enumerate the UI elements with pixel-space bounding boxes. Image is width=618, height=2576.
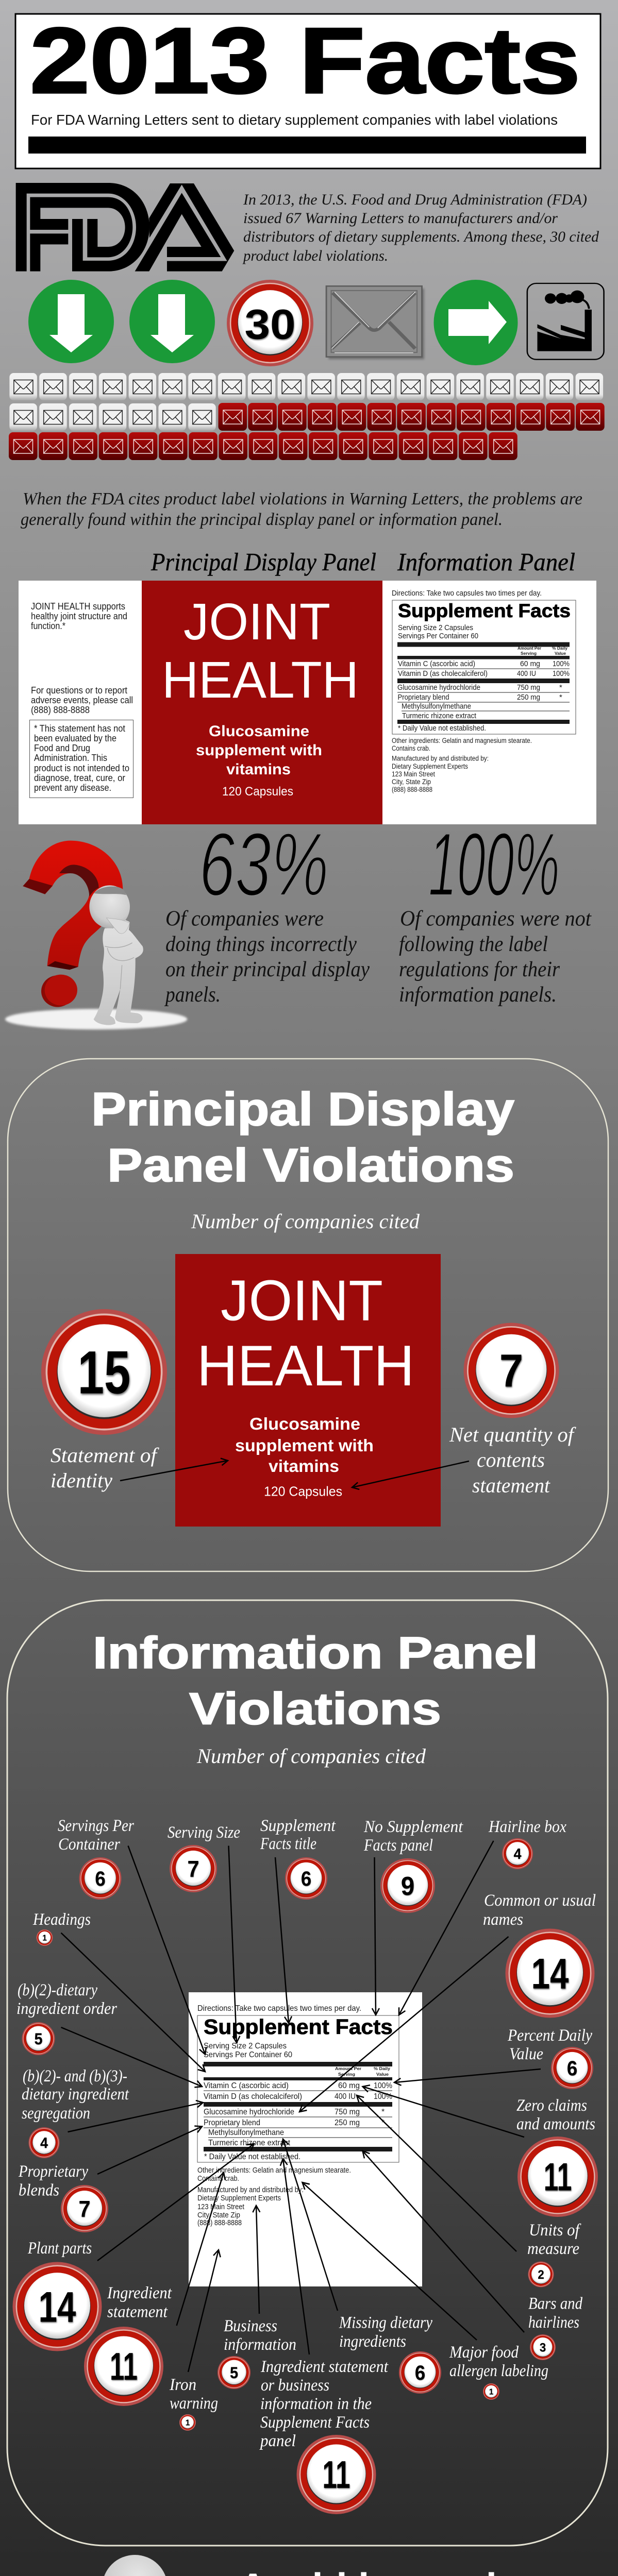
callout: proprietary blends 7: blends [19,2181,59,2200]
callout: ingredient statement 11 [84,2284,172,2406]
stat: 63 percent [164,815,370,1007]
icon: speed sign 30: 30 [244,301,296,348]
callout: ingredient statement or business information 11: information in the [260,2395,372,2413]
label left panel text: function.* [31,621,65,631]
supplement facts label: Other ingredients: Gelatin and magnesium stearate. [197,2166,351,2175]
title rule [28,137,586,154]
arrow: iron warning [188,2250,219,2372]
label left panel text: For questions or to report [31,685,127,696]
label left panel text: diagnose, treat, cure, or [34,773,125,783]
label supplement facts panel: Directions: Take two capsules two times per day. [392,589,542,598]
callout: hairline box 4: Hairline box [488,1818,566,1836]
red envelopes row 2 [219,403,605,431]
callout: missing dietary ingredients 6: Missing dietary [339,2313,432,2332]
label supplement facts panel: Amount Per [517,646,541,651]
callout: plant parts 14: 14 [39,2282,76,2331]
heading: information panel: Information Panel [397,548,575,576]
supplement facts label: (888) 888-8888 [197,2219,242,2227]
supplement facts label: * [381,2108,385,2116]
subheading: Number of companies cited [196,1744,426,1768]
callout: no supplement facts panel 9: 9 [401,1871,414,1901]
label left panel text: Food and Drug [34,743,90,753]
label supplement facts panel: Supplement Facts [398,600,571,621]
callout: business information 5: 5 [230,2364,238,2382]
supplement facts label: Glucosamine hydrochloride [204,2108,294,2116]
red principal display label [175,1254,441,1527]
supplement facts label: 100% [374,2081,392,2090]
icon: FDA logo [16,183,234,272]
label left panel text: JOINT HEALTH supports [31,601,125,612]
label supplement facts panel: 400 IU [517,669,536,678]
arrow: proprietary blends [97,2127,202,2174]
supplement facts label: * [381,2119,385,2127]
heading: principal display panel: Principal Display Panel [151,548,376,576]
callout: net quantity 7: contents [477,1448,545,1471]
arrow: headings [61,1933,205,2072]
label red principal panel: JOINT [183,593,330,651]
arrow: bars and hairlines [363,2151,524,2332]
label left panel text: healthy joint structure and [31,611,127,621]
subtitle: For FDA Warning Letters sent to dietary supplement companies with label violations [31,112,558,128]
label red principal panel: supplement with [196,742,322,759]
callout: proprietary blends 7 [18,2162,108,2232]
arrow: ingredient statement [177,2173,224,2326]
supplement facts label: Contains crab. [197,2175,239,2183]
callout: percent daily value 6: 6 [567,2057,577,2080]
arrow: units of measure [357,2095,516,2251]
callout: bars and hairlines 3 [528,2295,582,2360]
callout: ingredient segregation 4: segregation [22,2104,90,2123]
intro text: distributors of dietary supplements. Among these, 30 cited [243,228,599,245]
callout: ingredient statement or business information 11: Supplement Facts [260,2413,370,2432]
supplement facts label: Serving Size 2 Capsules [204,2042,287,2050]
callout: ingredient segregation 4: 4 [40,2135,48,2151]
callout: servings per container 6 [58,1817,134,1900]
red principal display label: Glucosamine [249,1414,360,1433]
label left panel text: been evaluated by the [34,733,116,743]
stat text: principal display [164,907,370,1007]
arrow: major food allergen [302,2182,477,2340]
label supplement facts panel: * Daily Value not established. [398,724,486,733]
intro text: In 2013, the U.S. Food and Drug Administration (FDA) [243,191,587,208]
supplement facts label: 250 mg [335,2119,360,2127]
callout: zero claims and amounts 11 [516,2096,598,2217]
illustration: figure with magnifying glass [40,2555,211,2576]
label red principal panel: 120 Capsules [222,785,293,799]
arrow: common names [299,1937,508,2112]
label left panel text: adverse events, please call [31,695,133,705]
callout: business information 5: Business [224,2317,277,2335]
supplement facts label: Dietary Supplement Experts [197,2194,281,2202]
label supplement facts panel: * [559,693,562,702]
label supplement facts panel: City, State Zip [392,778,431,786]
stat text: principal display: on their principal display [165,958,370,981]
label supplement facts panel: 123 Main Street [392,770,435,778]
callout: zero claims and amounts 11: Zero claims [516,2096,587,2115]
callout: iron warning 1 [169,2376,218,2431]
label supplement facts panel: 750 mg [517,683,540,692]
callout: percent daily value 6: Percent Daily [507,2026,592,2045]
label supplement facts panel: 100% [553,659,570,668]
label left panel text: product is not intended to [34,763,129,773]
callout: iron warning 1: warning [170,2394,218,2413]
icon: green down arrow 1 [28,280,114,363]
callout: percent daily value 6: Value [509,2045,543,2063]
callout: missing dietary ingredients 6 [339,2313,441,2394]
icon: green right arrow [434,280,517,365]
label supplement facts panel: (888) 888-8888 [392,786,432,793]
callout: zero claims and amounts 11: 11 [544,2156,572,2199]
white envelopes row 1 [9,373,603,400]
illustration: thinking figure with question mark [5,841,187,1029]
supplement facts label: Supplement Facts [204,2015,393,2039]
arrow: facts title [275,1857,289,2023]
supplement facts label: Amount Per [335,2066,362,2071]
callout: statement of identity 15 [41,1309,167,1492]
red principal display label: 120 Capsules [264,1484,342,1499]
callout: no supplement facts panel 9: No Supplement [363,1818,463,1836]
callout: ingredient statement 11: 11 [110,2345,138,2388]
label supplement facts panel: Manufactured by and distributed by: [392,755,489,762]
label red principal panel [142,581,382,824]
callout: net quantity 7: statement [472,1473,550,1497]
callout: statement of identity 15: 15 [78,1338,130,1406]
label left panel text: prevent any disease. [34,783,111,793]
red principal display label: JOINT [221,1269,383,1333]
callout: net quantity 7: Net quantity of [449,1423,576,1446]
label supplement facts panel: 100% [553,669,570,678]
question mark [23,841,123,1007]
callout: no supplement facts panel 9 [363,1818,463,1913]
arrow: missing ingredients [283,2139,338,2311]
platform [5,1009,187,1029]
arrow: zero claims [363,2087,524,2137]
callout: ingredient statement or business information 11: panel [259,2432,296,2450]
callout: missing dietary ingredients 6: 6 [415,2362,425,2384]
callout: missing dietary ingredients 6: ingredients [339,2332,406,2351]
callout: proprietary blends 7: Proprietary [18,2162,88,2181]
label left panel text [30,601,133,798]
label supplement facts panel: Vitamin D (as cholecalciferol) [398,669,488,678]
heading: Principal Display [91,1083,514,1136]
callout: net quantity 7: 7 [499,1345,523,1397]
callout: supplement facts title 6: Facts title [260,1835,316,1853]
product label [19,581,596,824]
icon: green down arrow 2 [129,280,215,363]
title panel [15,9,600,168]
callout: major food allergen labeling 1 [449,2343,548,2400]
supplement facts label: 400 IU [335,2092,356,2101]
red principal display label: supplement with [235,1436,374,1455]
supplement facts label: 123 Main Street [197,2203,244,2211]
supplement facts label: 750 mg [335,2108,360,2116]
icon: speed sign 30 [227,280,313,366]
arrow: serving size [229,1846,237,2043]
callout: plant parts 14 [12,2239,102,2351]
callout: ingredient statement or business information 11: or business [261,2376,329,2395]
panel: information panel violations [7,1600,608,2546]
icon: envelope [326,286,424,359]
label supplement facts panel: Proprietary blend [398,693,449,702]
callout: servings per container 6: Container [58,1835,120,1854]
callout: (b)(2) dietary ingredient order 5: 5 [34,2030,43,2048]
label supplement facts panel: Turmeric rhizone extract [402,711,477,720]
arrow: servings per container [128,1846,205,2055]
supplement facts label [189,1992,422,2286]
label supplement facts panel: 60 mg [520,659,540,668]
label red principal panel: vitamins [226,761,291,778]
callout: percent daily value 6 [507,2026,593,2089]
label supplement facts panel [392,589,576,793]
heading: Panel Violations [107,1140,514,1192]
heading: Information Panel [93,1628,538,1678]
supplement facts label: 60 mg [338,2081,360,2090]
supplement facts label: Vitamin C (ascorbic acid) [204,2081,289,2090]
stat: 100 percent [399,815,592,1007]
supplement facts label: Value [376,2072,389,2077]
callout: iron warning 1: Iron [169,2376,196,2394]
figure [89,885,143,1025]
callout: business information 5: information [224,2335,296,2354]
icon: factory [527,283,604,360]
heading: Violations [189,1684,441,1734]
arrow: statement of identity [120,1461,228,1481]
callout: ingredient statement or business information 11: 11 [323,2453,350,2496]
callout: bars and hairlines 3: Bars and [528,2295,582,2313]
icon grid: 67 warning letter envelopes [9,373,605,460]
callout: (b)(2) dietary ingredient order 5: (b)(2)-dietary [18,1981,97,1999]
white envelopes row 2 [9,403,216,431]
stat text: information panels: regulations for their [399,958,560,981]
callout: supplement facts title 6: Supplement [260,1817,336,1835]
callout: bars and hairlines 3: hairlines [528,2313,579,2332]
callout: serving size 7: Serving Size [168,1823,240,1842]
arrow: hairline box [399,1841,494,2015]
callout: serving size 7: 7 [187,1857,199,1882]
supplement facts label: 100% [374,2092,392,2101]
label supplement facts panel: 250 mg [517,693,540,702]
label supplement facts panel: Serving Size 2 Capsules [398,623,473,632]
callout: (b)(2) dietary ingredient order 5: ingredient order [16,1999,117,2018]
stat text: information panels: information panels. [399,983,557,1007]
label supplement facts panel: % Daily [552,646,568,651]
label supplement facts panel: Contains crab. [392,744,430,752]
callout: units of measure 2 [527,2221,581,2287]
callout: headings 1: Headings [32,1910,91,1929]
callout: common or usual names 14: 14 [531,1949,569,1997]
supplement facts label: City, State Zip [197,2211,240,2219]
callout: business information 5 [218,2317,296,2389]
intro text [242,191,599,264]
label supplement facts panel: Dietary Supplement Experts [392,762,468,770]
callout: ingredient statement 11: Ingredient [107,2284,172,2302]
stat text: information panels: Of companies were not [400,907,592,930]
arrow: ingredient segregation [68,2103,203,2132]
stat: 63 percent: 63% [199,815,329,915]
label left panel text: * This statement has not [34,723,125,734]
label supplement facts panel: Value [555,651,566,656]
label supplement facts panel: Glucosamine hydrochloride [397,683,480,692]
callout: plant parts 14: Plant parts [27,2239,92,2258]
callout: ingredient statement or business information 11: Ingredient statement [260,2358,389,2376]
stat text: information panels [399,907,592,1007]
callout: supplement facts title 6 [260,1817,336,1900]
arrow: no facts panel [374,1857,376,2015]
callout: major food allergen labeling 1: 1 [489,2387,494,2396]
red envelopes row 3 [9,432,517,460]
stat text: information panels: following the label [399,933,548,956]
callout: hairline box 4: 4 [513,1846,522,1862]
heading [93,1628,538,1734]
label supplement facts panel: * [559,683,562,692]
callout: supplement facts title 6: 6 [301,1868,311,1890]
intro text: issued 67 Warning Letters to manufacturers and/or [243,210,558,227]
label red principal panel: HEALTH [162,651,359,709]
callout: net quantity 7 [449,1323,576,1497]
subheading: Number of companies cited [191,1210,420,1233]
callout: units of measure 2: Units of [529,2221,581,2240]
supplement facts label: Methylsulfonylmethane [208,2128,284,2137]
callout: common or usual names 14: names [483,1910,523,1929]
callout: iron warning 1: 1 [186,2418,190,2427]
stat text: principal display: Of companies were [165,907,324,930]
callout: hairline box 4 [488,1818,566,1869]
callout: major food allergen labeling 1: Major food [449,2343,519,2362]
explanatory text: generally found within the principal display panel or information panel. [21,510,503,529]
explanatory text [21,489,582,529]
callout: ingredient statement or business information 11 [259,2358,389,2514]
heading [91,1083,514,1192]
callout: servings per container 6: Servings Per [58,1817,134,1835]
supplement facts label: Turmeric rhizone extract [208,2139,291,2147]
arrow: percent daily value [394,2069,541,2082]
supplement facts label: Servings Per Container 60 [204,2050,292,2059]
title: 2013 Facts [30,9,580,113]
callout: headings 1 [32,1910,91,1946]
label supplement facts panel: Serving [521,651,537,656]
callout: zero claims and amounts 11: and amounts [516,2115,595,2133]
callout: headings 1: 1 [42,1934,47,1942]
supplement facts label: Manufactured by and distributed by: [197,2186,304,2194]
callout: ingredient segregation 4: (b)(2)- and (b)(3)- [23,2067,127,2086]
supplement facts label: Directions: Take two capsules two times per day. [197,2004,361,2013]
red principal display label: vitamins [269,1456,339,1476]
callout: servings per container 6: 6 [95,1868,106,1890]
callout: (b)(2) dietary ingredient order 5 [16,1981,117,2055]
callout: units of measure 2: measure [527,2240,579,2258]
label left panel text: (888) 888-8888 [31,705,90,715]
explanatory text: When the FDA cites product label violations in Warning Letters, the problems are [23,489,582,509]
callout: statement of identity 15: Statement of [51,1444,159,1467]
callout: common or usual names 14 [483,1891,596,2018]
label supplement facts panel: Vitamin C (ascorbic acid) [398,659,475,668]
callout: major food allergen labeling 1: allergen labeling [449,2362,548,2380]
arrow: ingredient order [61,2027,202,2087]
supplement facts label: * Daily Value not established. [204,2153,300,2161]
callout: proprietary blends 7: 7 [78,2197,91,2222]
supplement facts label: % Daily [374,2066,390,2071]
callout: statement of identity 15: identity [51,1469,112,1492]
callout: units of measure 2: 2 [538,2268,544,2282]
panel: principal display panel violations [8,1059,608,1571]
callout: serving size 7 [168,1823,240,1892]
arrow: net quantity [352,1461,469,1487]
arrow: statement or business info in panel [283,2159,309,2354]
callout: no supplement facts panel 9: Facts panel [363,1836,433,1855]
supplement facts label: Serving [338,2072,355,2077]
label left panel text: Administration. This [34,753,107,763]
label supplement facts panel: Servings Per Container 60 [398,632,478,640]
supplement facts label: Proprietary blend [204,2119,260,2127]
supplement facts label: Vitamin D (as cholecalciferol) [204,2092,302,2101]
stat text: principal display: doing things incorrectly [165,933,357,956]
callout: ingredient segregation 4: dietary ingredient [22,2085,129,2104]
callout: ingredient statement 11: statement [107,2303,168,2321]
arrow: plant parts [97,2144,254,2261]
label supplement facts panel: Methylsulfonylmethane [402,702,471,711]
intro text: product label violations. [242,247,388,264]
label red principal panel: Glucosamine [209,723,309,740]
callout: common or usual names 14: Common or usual [484,1891,596,1910]
callout: ingredient segregation 4 [22,2067,129,2158]
callout: bars and hairlines 3: 3 [540,2341,546,2354]
label supplement facts panel: Other ingredients: Gelatin and magnesium stearate. [392,737,532,744]
arrow: business information [256,2206,259,2314]
red principal display label: HEALTH [197,1334,414,1398]
stat text: principal display: panels. [164,983,221,1007]
